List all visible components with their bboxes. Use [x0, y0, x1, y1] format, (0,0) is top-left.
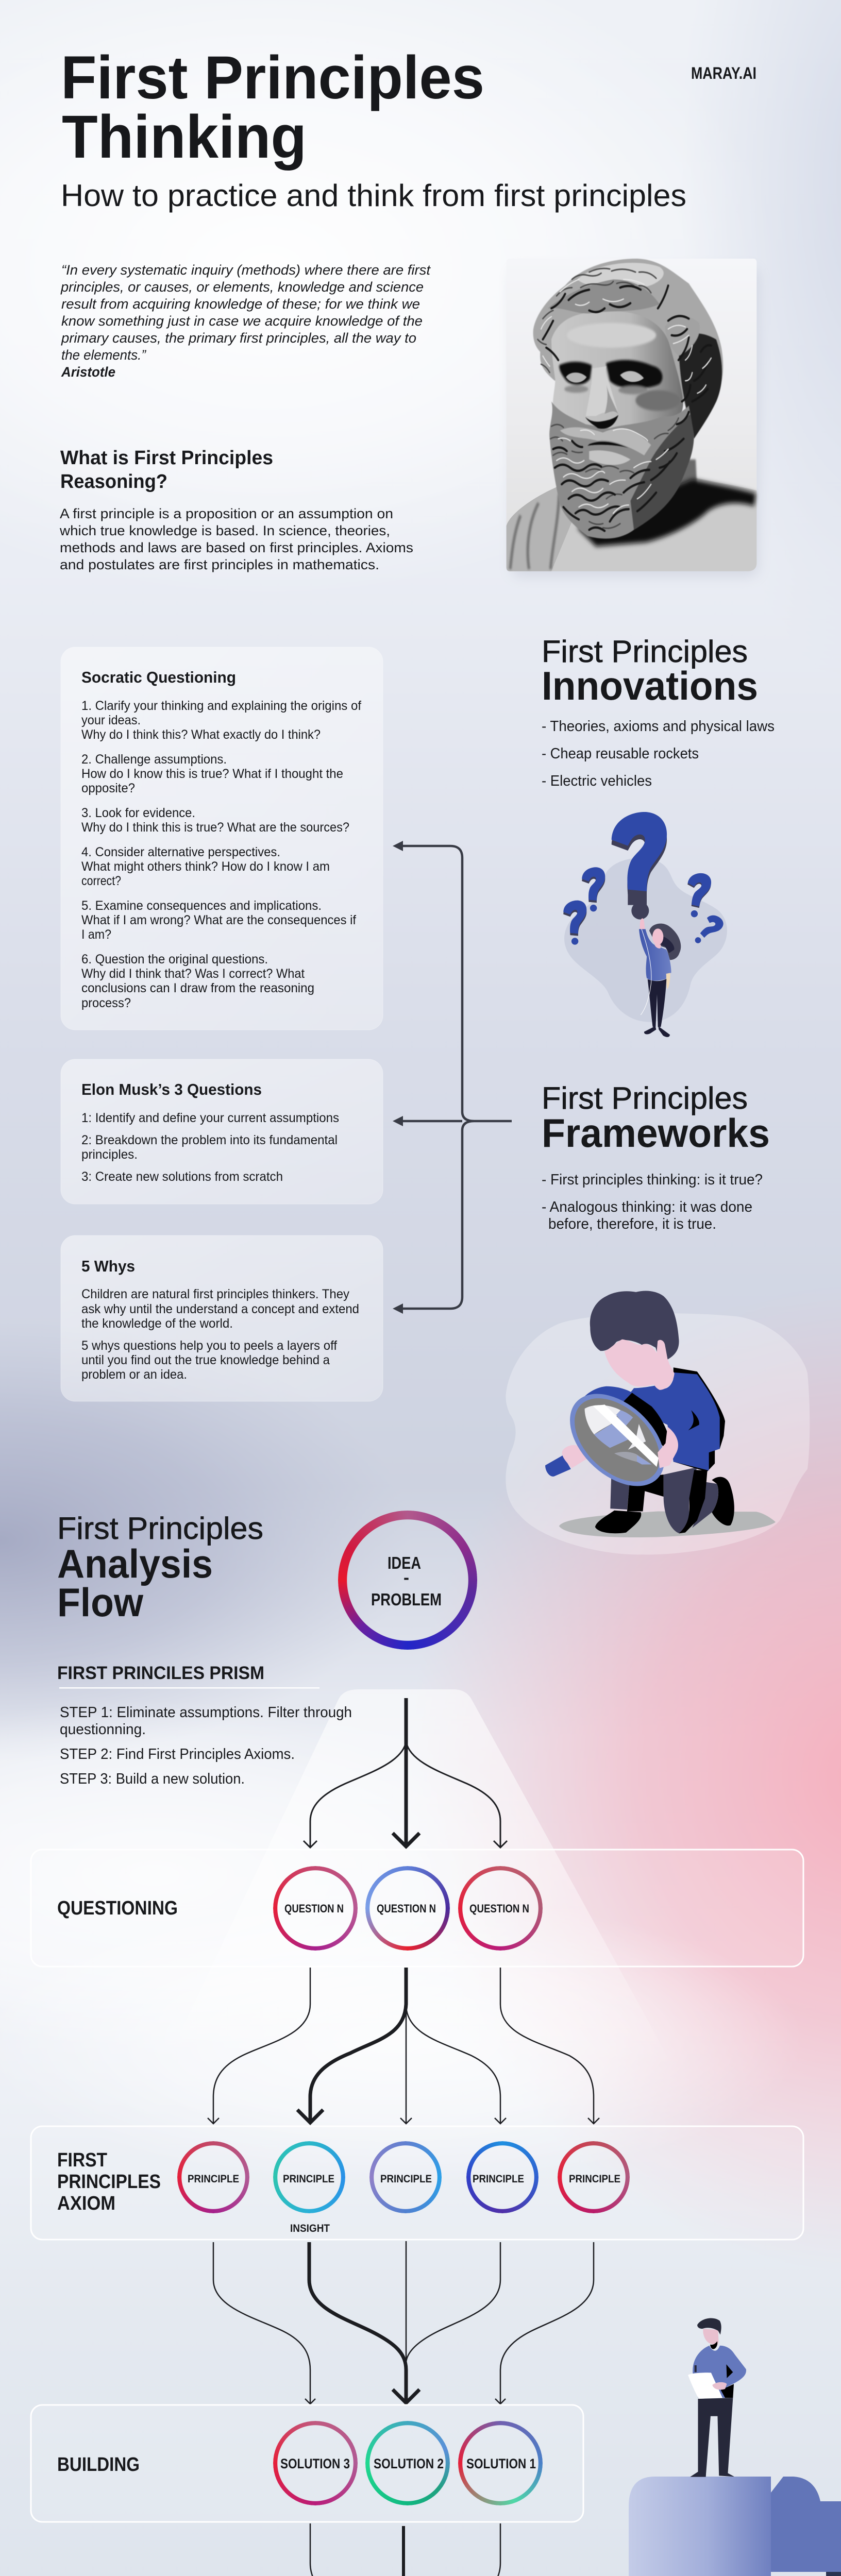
panel: building: [31, 2405, 583, 2522]
arrows: axioms to building: [213, 2241, 594, 2404]
panel: 5 Whys: [61, 1235, 383, 1401]
heading: First Principles Frameworks: First Principles: [542, 1081, 748, 1115]
heading: First Principles Analysis Flow: [57, 1511, 263, 1625]
panel: Socratic Questioning: 1. Clarify your thinking and explaining the origins of: [81, 699, 361, 713]
panel: Socratic Questioning: How do I know this is true? What if I thought the: [81, 767, 343, 781]
panel: Socratic Questioning: 3. Look for evidence.: [81, 806, 195, 820]
panel: questioning: QUESTION N: [469, 1902, 529, 1915]
panel: first principles axiom: PRINCIPLE: [473, 2173, 524, 2185]
list: frameworks: - First principles thinking: is it true?: [542, 1172, 763, 1188]
panel: Socratic Questioning: I am?: [81, 927, 111, 942]
panel: questioning: [31, 1850, 803, 1967]
panel: Socratic Questioning: 5. Examine consequences and implications.: [81, 899, 322, 913]
quote text block: the elements.”: [61, 347, 146, 363]
heading: what is first principles reasoning: Reasoning?: [60, 471, 167, 493]
panel: Elon Musk's 3 Questions: 1: Identify and define your current assumptions: [81, 1111, 339, 1125]
arrows: questioning to axioms: [208, 1968, 599, 2124]
panel: Socratic Questioning: Why did I think that? Was I correct? What: [81, 967, 305, 981]
steps text block: STEP 1: Eliminate assumptions. Filter through: [60, 1704, 352, 1721]
panel: 5 Whys: problem or an idea.: [81, 1367, 187, 1382]
steps text block: STEP 2: Find First Principles Axioms.: [60, 1746, 295, 1762]
illustration: man with clipboard: [688, 2318, 746, 2477]
panel: Socratic Questioning: 4. Consider alternative perspectives.: [81, 845, 280, 859]
panel: 5 Whys: until you find out the true knowledge behind a: [81, 1353, 330, 1367]
panel: 5 Whys: 5 Whys: [81, 1257, 135, 1275]
arrows: problem to questioning: [304, 1698, 507, 1848]
node: idea / problem: [338, 1511, 477, 1650]
quote text block: primary causes, the primary first principles, all the way to: [61, 330, 416, 346]
heading: First Principles Analysis Flow: First Principles: [57, 1511, 263, 1546]
panel: first principles axiom: PRINCIPLE: [188, 2173, 239, 2185]
steps text block: STEP 3: Build a new solution.: [60, 1771, 245, 1787]
panel: first principles axiom: PRINCIPLE: [380, 2173, 432, 2185]
panel: Elon Musk's 3 Questions: Elon Musk’s 3 Questions: [81, 1080, 262, 1098]
panel: questioning: QUESTION N: [284, 1902, 344, 1915]
quote text block: [60, 262, 431, 380]
panel: Socratic Questioning: 2. Challenge assumptions.: [81, 752, 227, 767]
bracket arrow connecting frameworks to panels: [393, 841, 512, 1314]
heading: First Principles Analysis Flow: Flow: [57, 1580, 143, 1625]
list: frameworks: before, therefore, it is true.: [548, 1216, 716, 1232]
brand label: MARAY.AI: [691, 64, 756, 82]
illustration: woman and question marks: [563, 812, 727, 1037]
list: innovations: - Theories, axioms and physical laws: [542, 718, 775, 735]
list: frameworks: - Analogous thinking: it was done: [542, 1199, 752, 1215]
heading: First Principles Frameworks: [542, 1081, 770, 1156]
panel: 5 Whys: the knowledge of the world.: [81, 1316, 233, 1331]
panel: Elon Musk's 3 Questions: [61, 1059, 383, 1204]
quote text block: Aristotle: [61, 364, 115, 380]
quote text block: principles, or causes, or elements, knowledge and science: [60, 279, 424, 295]
title: [61, 44, 484, 171]
panel: building: SOLUTION 2: [374, 2456, 444, 2471]
panel: Socratic Questioning: your ideas.: [81, 713, 141, 727]
definition paragraph: A first principle is a proposition or an assumption on: [60, 506, 393, 521]
node: idea / problem: PROBLEM: [371, 1590, 442, 1609]
definition paragraph: [59, 506, 413, 572]
panel: questioning: QUESTION N: [377, 1902, 436, 1915]
heading: First Principles Frameworks: Frameworks: [542, 1110, 770, 1156]
image: bust of Aristotle: [507, 259, 759, 577]
panel: Socratic Questioning: conclusions can I draw from the reasoning: [81, 981, 314, 995]
panel: Elon Musk's 3 Questions: 2: Breakdown the problem into its fundamental: [81, 1133, 338, 1147]
panel: Socratic Questioning: correct?: [81, 874, 121, 888]
panel: Socratic Questioning: [61, 647, 383, 1030]
panel: Elon Musk's 3 Questions: 3: Create new solutions from scratch: [81, 1170, 283, 1184]
panel: Socratic Questioning: opposite?: [81, 781, 135, 795]
panel: Socratic Questioning: process?: [81, 996, 131, 1010]
panel: Socratic Questioning: Socratic Questioning: [81, 668, 236, 686]
prism light beam: [162, 1689, 676, 2071]
steps text block: [60, 1704, 352, 1787]
panel: building: SOLUTION 1: [466, 2456, 536, 2471]
heading: First Principles Innovations: [542, 634, 758, 708]
panel: Elon Musk's 3 Questions: principles.: [81, 1147, 138, 1162]
list: innovations: - Cheap reusable rockets: [542, 745, 699, 762]
node: idea / problem: -: [403, 1568, 409, 1587]
panel: Socratic Questioning: Why do I think this? What exactly do I think?: [81, 727, 321, 742]
definition paragraph: and postulates are first principles in mathematics.: [60, 557, 379, 572]
panel: Socratic Questioning: 6. Question the original questions.: [81, 952, 268, 967]
list: innovations: - Electric vehicles: [542, 773, 652, 789]
heading: First Principles Innovations: First Principles: [542, 634, 748, 669]
panel: first principles axiom: PRINCIPLES: [57, 2171, 161, 2193]
subtitle: How to practice and think from first principles: [61, 178, 686, 213]
panel: first principles axiom: [31, 2126, 803, 2240]
heading: First Principles Analysis Flow: Analysis: [57, 1541, 213, 1586]
panel: first principles axiom: PRINCIPLE: [569, 2173, 620, 2185]
definition paragraph: methods and laws are based on first principles. Axioms: [60, 540, 413, 555]
node: idea / problem: IDEA: [388, 1553, 421, 1572]
panel: first principles axiom: FIRST: [57, 2149, 107, 2171]
heading: what is first principles reasoning: What is First Principles: [60, 447, 273, 469]
list: innovations: [542, 718, 775, 789]
arrows: building to outcome: [310, 2523, 500, 2576]
title: Thinking: [62, 103, 307, 171]
panel: questioning: QUESTIONING: [57, 1897, 178, 1919]
panel: building: SOLUTION 3: [280, 2456, 350, 2471]
panel: Socratic Questioning: What if I am wrong? What are the consequences if: [81, 913, 356, 927]
quote text block: “In every systematic inquiry (methods) where there are first: [61, 262, 431, 278]
title: First Principles: [61, 44, 484, 112]
panel: 5 Whys: ask why until the understand a concept and extend: [81, 1302, 359, 1316]
illustration: pipe: [579, 2477, 841, 2576]
panel: 5 Whys: Children are natural first principles thinkers. They: [81, 1287, 349, 1301]
panel: first principles axiom: INSIGHT: [290, 2223, 330, 2234]
panel: 5 Whys: 5 whys questions help you to peels a layers off: [81, 1338, 337, 1353]
definition paragraph: which true knowledge is based. In science, theories,: [59, 523, 390, 538]
heading: first principles prism: FIRST PRINCILES PRISM: [57, 1663, 264, 1683]
panel: first principles axiom: AXIOM: [57, 2193, 115, 2214]
heading: what is first principles reasoning: [60, 447, 273, 493]
steps text block: questionning.: [60, 1721, 146, 1738]
panel: first principles axiom: PRINCIPLE: [283, 2173, 334, 2185]
quote text block: result from acquiring knowledge of these; for we think we: [61, 296, 420, 312]
list: frameworks: [542, 1172, 763, 1232]
heading: First Principles Innovations: Innovations: [542, 663, 758, 708]
panel: building: BUILDING: [57, 2454, 140, 2476]
panel: Socratic Questioning: Why do I think this is true? What are the sources?: [81, 820, 349, 835]
illustration: boy with magnifying glass: [506, 1291, 810, 1555]
quote text block: know something just in case we acquire knowledge of the: [61, 313, 423, 329]
panel: Socratic Questioning: What might others think? How do I know I am: [81, 859, 330, 874]
